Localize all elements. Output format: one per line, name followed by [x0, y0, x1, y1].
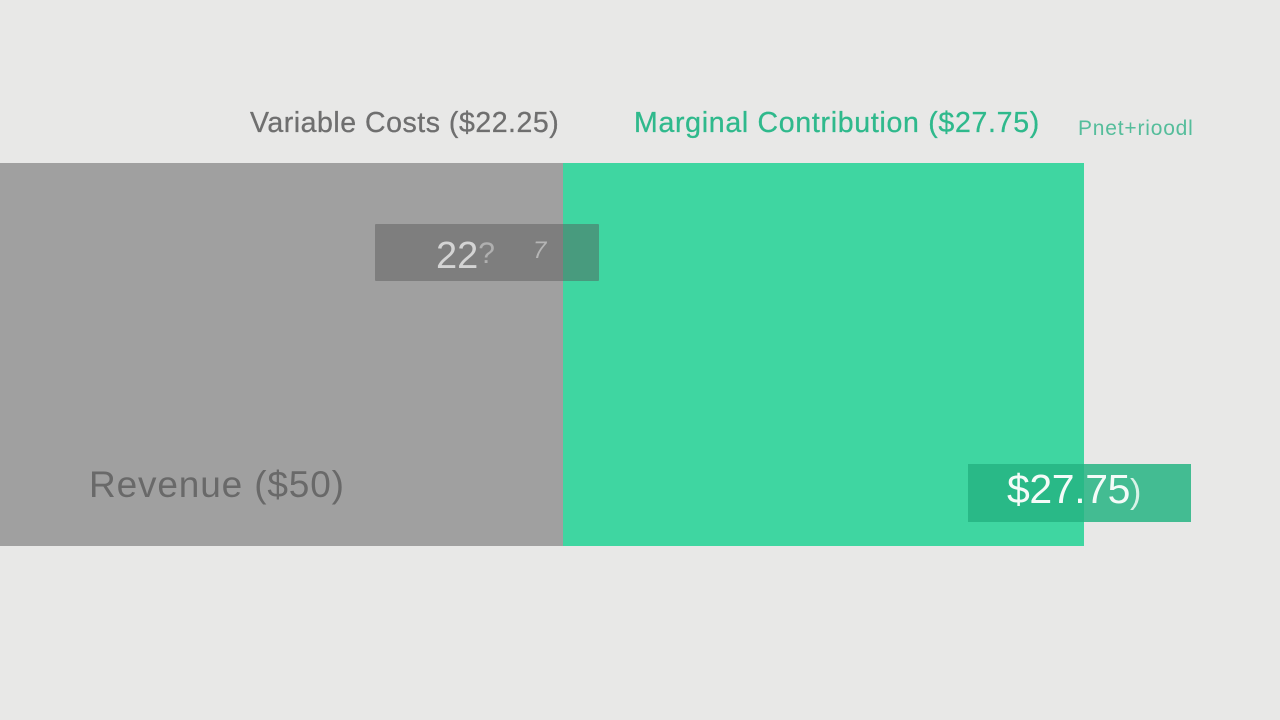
bar: marginal contribution segment: [563, 163, 1084, 546]
label: per period: Pnet+rioodl: [1078, 117, 1194, 140]
bar: revenue variable cost segment: [0, 163, 563, 546]
heading: variable costs: Variable Costs ($22.25): [250, 107, 559, 139]
label: revenue: Revenue ($50): [89, 464, 345, 505]
callout: variable cost value: [375, 224, 599, 281]
heading: marginal contribution: Marginal Contribution ($27.75): [634, 107, 1040, 139]
callout text: $27.75): [1007, 466, 1141, 512]
callout text: 22? 7: [436, 235, 546, 277]
callout: marginal contribution value: [968, 464, 1191, 522]
